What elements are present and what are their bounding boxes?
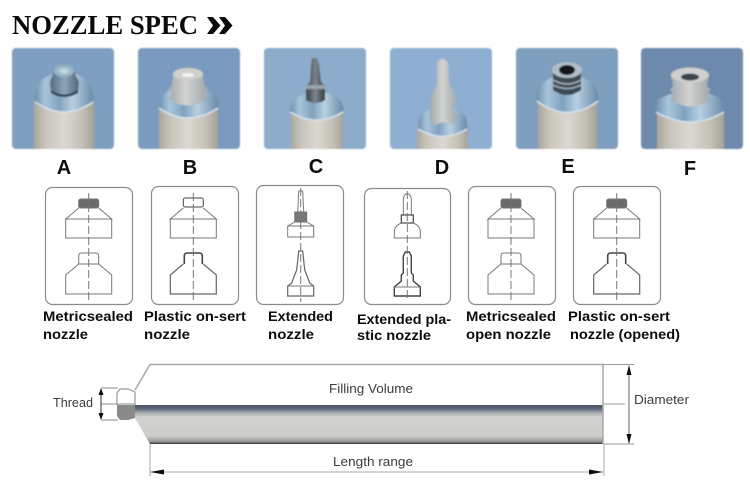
diagram panel C: extended nozzle [256, 186, 344, 304]
photo E: metric sealed open nozzle [516, 48, 618, 149]
photo A: metric sealed nozzle [12, 48, 114, 149]
diagram panel E: metricsealed open nozzle [468, 186, 556, 304]
thread dimension [98, 388, 135, 420]
icon: double chevron [207, 17, 232, 34]
letter labels A to F: D [435, 157, 449, 179]
nozzle type captions: Extended [268, 308, 333, 324]
dimension labels: Diameter [634, 393, 689, 407]
nozzle type captions: Metricsealed [466, 308, 556, 324]
diagram panel F: plastic on-sert nozzle opened [574, 186, 660, 304]
tube dimension diagram [53, 364, 689, 476]
title: NOZZLE SPEC: NOZZLE SPEC [12, 10, 198, 40]
letter labels A to F: C [309, 156, 323, 178]
tube upper outline [135, 364, 603, 444]
nozzle type captions [43, 308, 680, 343]
diagram panel A: metricsealed nozzle [46, 188, 132, 304]
letter labels A to F: B [183, 157, 197, 179]
letter labels A to F: A [57, 157, 71, 179]
nozzle type captions: Extended pla- [357, 311, 451, 327]
diagram panel B: plastic on-sert nozzle [152, 186, 238, 304]
nozzle thread [117, 389, 135, 420]
diagram panel D: extended plastic nozzle [364, 188, 450, 304]
nozzle type captions: nozzle [144, 326, 190, 342]
dimension labels: Thread [53, 396, 93, 410]
nozzle type captions: stic nozzle [357, 327, 431, 343]
dimension labels [53, 382, 689, 469]
tube lower half, metallic [135, 405, 603, 444]
nozzle type captions: Metricsealed [43, 308, 133, 324]
photo D: extended plastic nozzle [390, 48, 492, 149]
nozzle type captions: nozzle (opened) [570, 326, 680, 342]
photo F: plastic on-sert nozzle opened [641, 48, 743, 149]
nozzle type captions: Plastic on-sert [144, 308, 246, 324]
photo B: plastic on-sert nozzle [138, 48, 240, 149]
nozzle type captions: nozzle [268, 326, 314, 342]
nozzle type captions: nozzle [43, 326, 88, 342]
letter labels A to F: F [684, 158, 696, 180]
photo C: extended nozzle [264, 48, 366, 149]
nozzle type captions: Plastic on-sert [568, 308, 670, 324]
letter labels A to F [57, 156, 696, 180]
length dimension [150, 444, 604, 476]
dimension labels: Filling Volume [329, 382, 413, 396]
diameter dimension [603, 364, 634, 444]
nozzle type captions: open nozzle [466, 326, 551, 342]
dimension labels: Length range [333, 455, 413, 469]
letter labels A to F: E [561, 156, 575, 178]
